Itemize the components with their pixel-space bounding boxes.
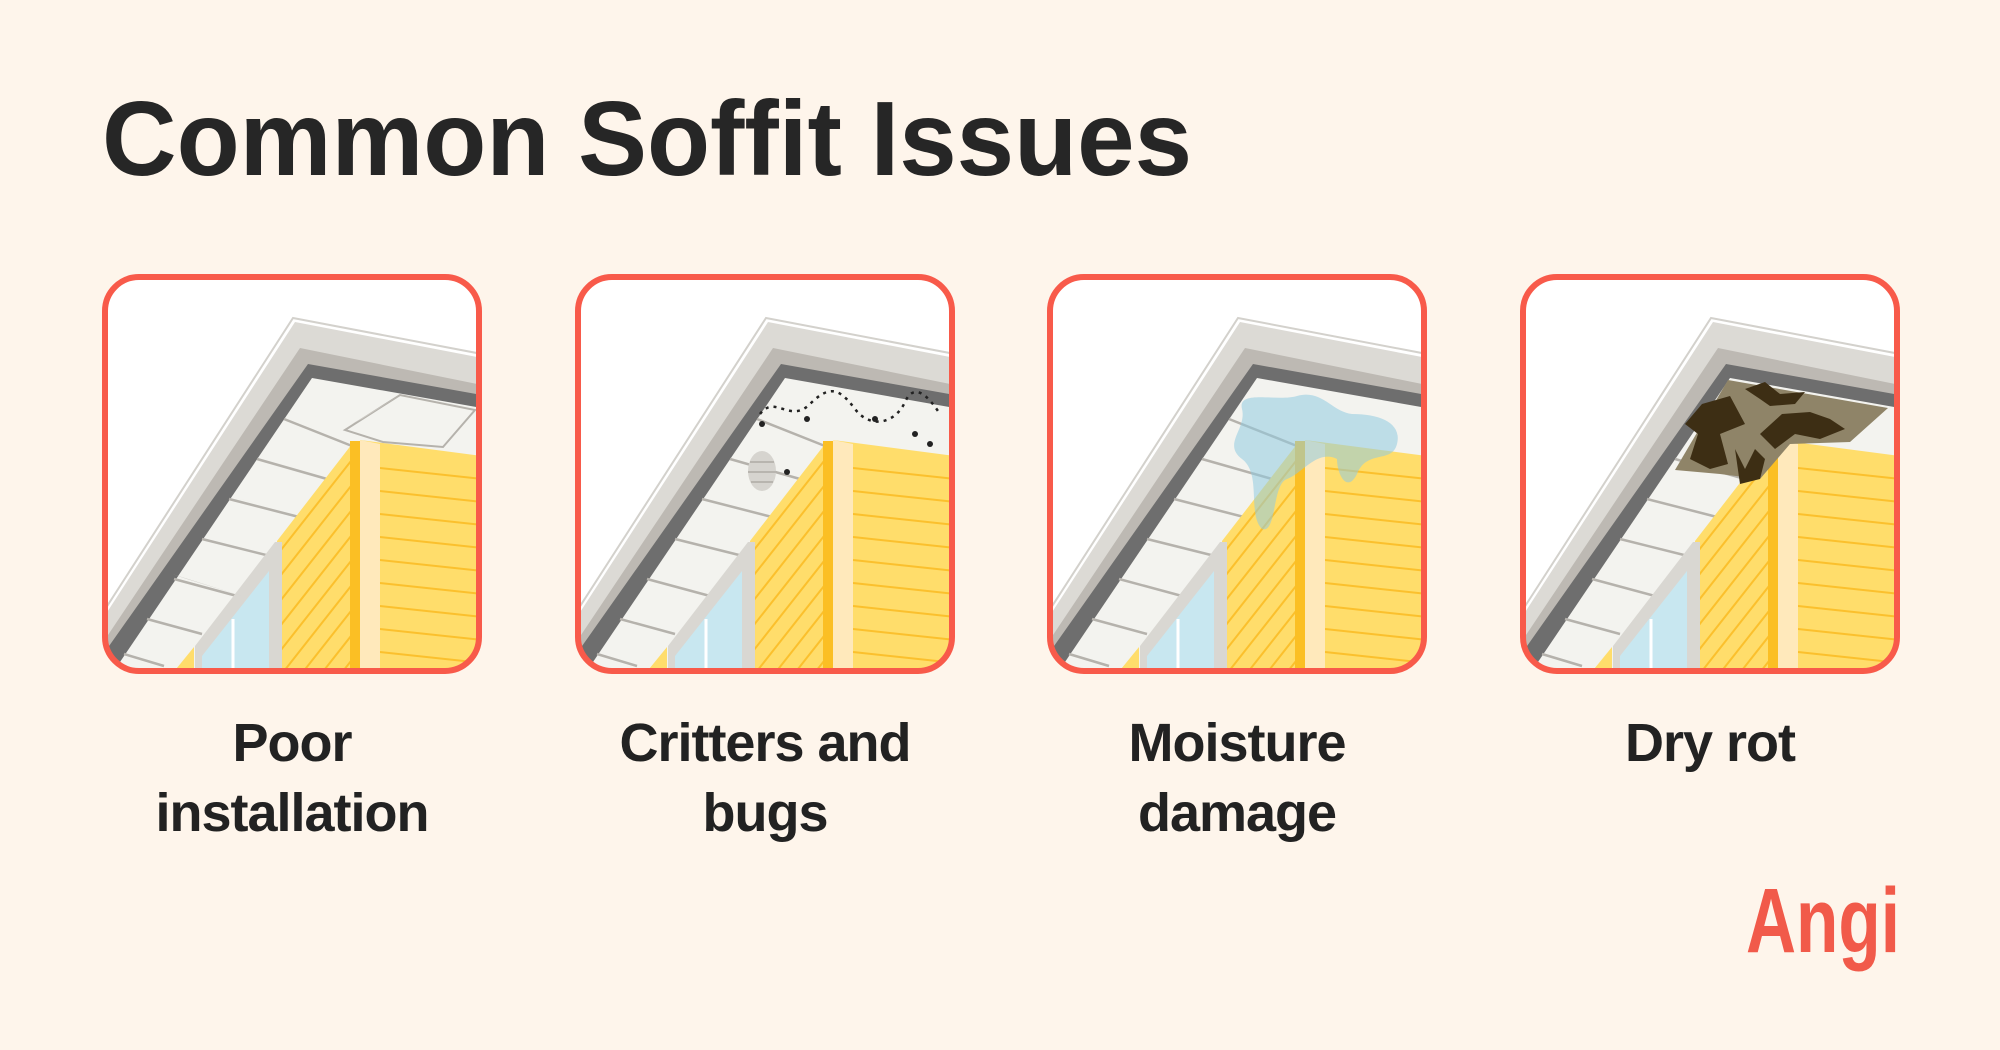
- label: critters and bugs: Critters and: [619, 713, 911, 773]
- label: poor installation: installation: [155, 783, 429, 843]
- label: moisture damage: damage: [1138, 783, 1336, 843]
- label: moisture damage: Moisture: [1128, 713, 1346, 773]
- label: poor installation: [155, 713, 429, 843]
- panel: dry rot: [1520, 274, 1900, 674]
- label: moisture damage: [1128, 713, 1346, 843]
- panel: poor installation: [102, 274, 482, 674]
- label: critters and bugs: [619, 713, 911, 843]
- icon: bug trail and holes: [748, 391, 940, 491]
- label: critters and bugs: bugs: [702, 783, 828, 843]
- icon: rot patch: [1675, 380, 1888, 484]
- label: dry rot: Dry rot: [1625, 713, 1795, 773]
- panel: critters and bugs: [575, 274, 955, 674]
- title: Common Soffit Issues: [102, 80, 1192, 198]
- label: poor installation: Poor: [232, 713, 352, 773]
- icon: water stain: [1234, 395, 1398, 529]
- panel: moisture damage: [1047, 274, 1427, 674]
- icon: loose soffit panel: [172, 395, 475, 596]
